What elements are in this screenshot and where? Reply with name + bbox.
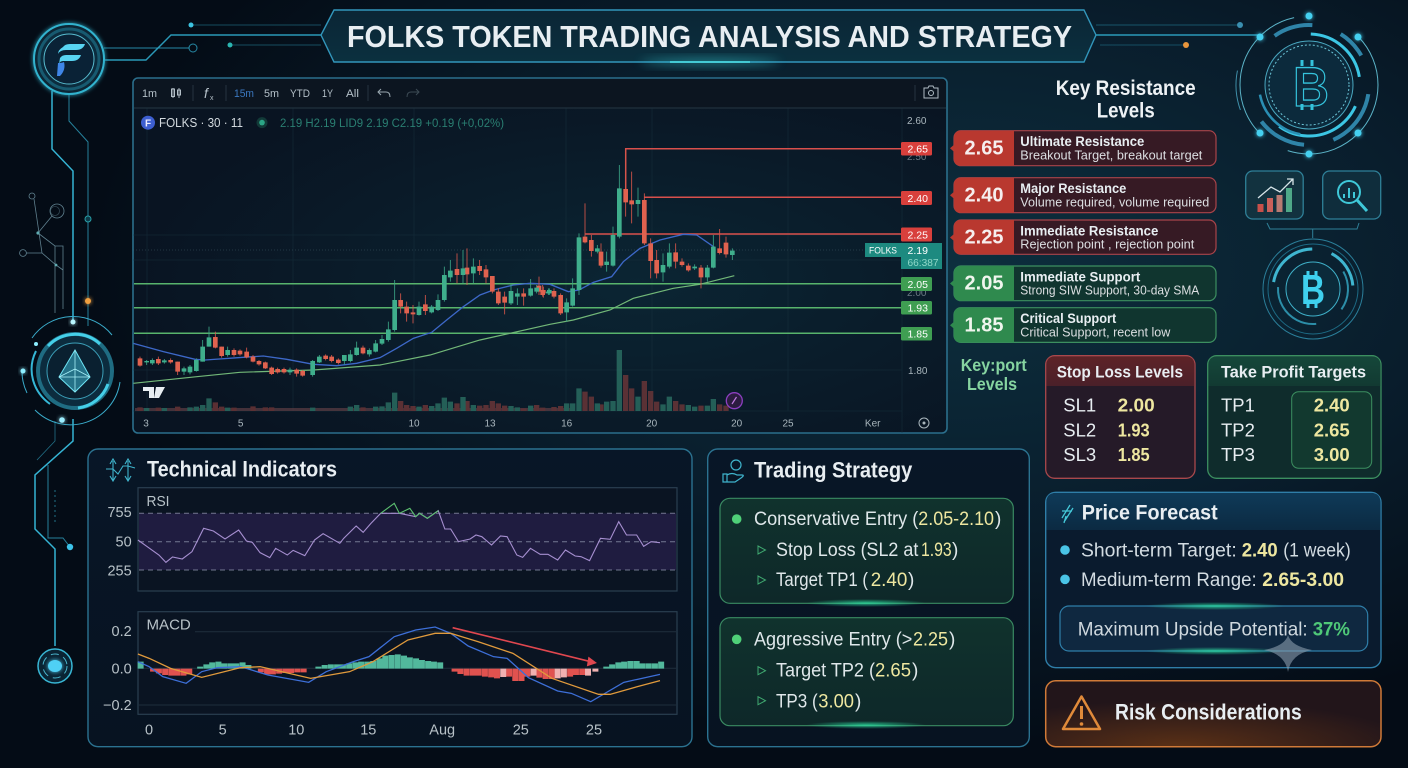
chart grid (133, 108, 902, 433)
take profit rows: TP3 (1221, 444, 1255, 465)
MACD chart (103, 612, 677, 714)
card: aggressive entry: Aggressive Entry (> (754, 630, 912, 651)
icon: bottom node (38, 649, 72, 683)
RSI chart: 50 (116, 535, 132, 551)
sparkle (1264, 635, 1312, 672)
stop loss rows: 2.00 (1118, 395, 1155, 416)
card: 2.40 major resistance: Major Resistance (1020, 181, 1127, 196)
card: 2.40 major resistance: 2.40 (965, 184, 1003, 206)
price axis (865, 116, 942, 377)
indicator x axis (145, 722, 602, 738)
time axis: 20 (646, 418, 658, 430)
time axis: 20 (731, 418, 743, 430)
panel: take profit targets: Take Profit Targets (1221, 362, 1366, 381)
time axis: 25 (782, 418, 794, 430)
card: 2.25 immediate resistance: Immediate Resistance (1020, 223, 1159, 238)
price axis: 2.65 (908, 144, 928, 156)
card: aggressive entry: ) (912, 661, 918, 682)
chart toolbar: 15m (234, 88, 254, 100)
forecast bullets: Medium-term Range: (1081, 570, 1257, 591)
MACD chart: 0.0 (112, 661, 132, 677)
panel: price forecast (1046, 492, 1381, 672)
MACD chart: MACD (146, 616, 191, 633)
RSI chart: 755 (107, 505, 132, 521)
MACD chart: −0.2 (103, 698, 132, 714)
card: 2.25 immediate resistance: 2.25 (965, 227, 1003, 249)
icon: magnifier tile (1323, 171, 1381, 219)
indicator x axis: 25 (513, 722, 529, 738)
icon: forecast bolt (1062, 505, 1073, 523)
card: conservative entry: Target TP1 ( (776, 570, 869, 591)
price axis: 2.05 (908, 279, 928, 291)
MACD chart: 0.2 (112, 624, 132, 640)
price axis: 1.93 (908, 303, 928, 315)
icon: bitcoin coin (1263, 239, 1363, 339)
card: 2.05 immediate support: Immediate Support (1020, 269, 1141, 284)
forecast bullets: Short-term Target: (1081, 541, 1237, 562)
price axis: 2.60 (907, 116, 927, 127)
chart toolbar: 1Y (322, 88, 334, 100)
card: 2.65 ultimate resistance: Ultimate Resistance (1020, 134, 1145, 149)
label: key support levels (961, 355, 1027, 394)
card: conservative entry: ) (995, 509, 1001, 530)
chart toolbar: YTD (290, 88, 310, 100)
time axis: Ker (865, 418, 881, 430)
stop loss rows (1063, 395, 1155, 465)
indicator x axis: 25 (586, 722, 602, 738)
panel: stop loss levels: Stop Loss Levels (1057, 362, 1183, 381)
chart legend: FOLKS · 30 · 11 (159, 115, 243, 130)
card: 2.65 ultimate resistance: Breakout Target, breakout target (1020, 148, 1203, 162)
card: conservative entry: 1.93 (921, 540, 952, 561)
card: 1.85 critical support: 1.85 (965, 314, 1003, 336)
indicator x axis: 15 (360, 722, 376, 738)
take profit rows: TP1 (1221, 395, 1255, 416)
moving averages (133, 234, 734, 383)
circuit decoration: left rail (20, 91, 91, 646)
time axis: 13 (484, 418, 496, 430)
take profit rows (1221, 395, 1350, 465)
card: 2.05 immediate support: Strong SIW Support, 30-day SMA (1020, 284, 1200, 298)
RSI chart: 255 (107, 564, 132, 580)
stop loss rows: 1.93 (1118, 420, 1150, 441)
panel: stop loss levels (1046, 356, 1195, 478)
stop loss rows: SL3 (1063, 444, 1096, 465)
label: key support levels: Levels (967, 374, 1017, 394)
card: conservative entry (720, 498, 1013, 607)
card: aggressive entry: 2.25 (913, 630, 948, 651)
chart toolbar: 1m (142, 88, 157, 100)
card: conservative entry: 2.40 (871, 570, 907, 591)
card: conservative entry: 2.05-2.10 (918, 509, 994, 530)
indicator x axis: Aug (429, 722, 455, 738)
icon: Ethereum node (20, 316, 120, 425)
card: 2.25 immediate resistance: Rejection point , rejection point (1020, 238, 1195, 252)
chart toolbar: f (204, 85, 210, 101)
circuit decoration: top lines (100, 22, 1260, 60)
card: 2.65 ultimate resistance: 2.65 (965, 137, 1003, 159)
card: aggressive entry (720, 618, 1013, 729)
candlesticks (140, 149, 732, 377)
indicator x axis: 0 (145, 722, 153, 738)
card: aggressive entry: ) (855, 691, 861, 712)
chart toolbar: 5m (264, 88, 279, 100)
card: 2.25 immediate resistance (950, 220, 1216, 254)
chart legend (141, 115, 504, 130)
card: conservative entry: ) (952, 540, 958, 561)
panel: technical indicators (88, 449, 692, 747)
icon: warning triangle (1063, 696, 1100, 729)
icon: hand with coin (723, 460, 743, 482)
panel: risk considerations: Risk Considerations (1115, 699, 1302, 724)
time axis (143, 418, 929, 430)
panel: candlestick chart (133, 78, 947, 433)
card: aggressive entry: 2.65 (875, 661, 911, 682)
volume bars (135, 350, 726, 411)
time axis: 16 (561, 418, 573, 430)
take profit rows: 2.65 (1314, 420, 1350, 441)
card: 2.40 major resistance: Volume required, volume required (1020, 195, 1209, 209)
icon: Folks logo (34, 24, 104, 94)
time axis: 5 (238, 418, 244, 430)
time axis: 10 (408, 418, 420, 430)
panel: take profit targets (1208, 356, 1381, 478)
card: aggressive entry: Target TP2 ( (776, 661, 876, 682)
MACD histogram (141, 654, 661, 681)
price axis: 1.85 (908, 329, 928, 341)
chart toolbar: All (346, 88, 359, 100)
resistance lines (585, 149, 902, 234)
price axis: 1.80 (908, 366, 928, 377)
card: conservative entry: ) (908, 570, 914, 591)
title banner (321, 10, 1096, 65)
chart legend: 2.19 H2.19 LID9 2.19 C2.19 +0.19 (+0,02%) (280, 118, 504, 130)
price axis: 2.40 (908, 193, 928, 205)
forecast bullets: 2.40 (1242, 541, 1278, 562)
indicator x axis: 5 (219, 722, 227, 738)
icon: bitcoin coin: B (1301, 266, 1325, 313)
event marker (726, 393, 742, 409)
TradingView mark (143, 387, 165, 398)
support lines (134, 284, 902, 333)
indicator x axis: 10 (288, 722, 304, 738)
price axis: 2.00 (907, 288, 927, 299)
RSI chart: RSI (146, 493, 170, 510)
heading: key resistance levels: Key Resistance (1056, 77, 1196, 100)
card: aggressive entry: TP3 ( (776, 691, 818, 712)
maximum upside callout: Maximum Upside Potential: (1078, 620, 1308, 641)
stop loss rows: 1.85 (1118, 444, 1150, 465)
card: 1.85 critical support: Critical Support (1020, 311, 1117, 326)
price axis: 2.25 (908, 230, 928, 242)
take profit rows: 3.00 (1314, 444, 1350, 465)
forecast bullets (1060, 541, 1351, 591)
panel: risk considerations (1046, 681, 1381, 747)
card: 2.05 immediate support (950, 266, 1216, 301)
card: 2.65 ultimate resistance (950, 131, 1216, 166)
panel: trading strategy (708, 449, 1029, 747)
heading: key resistance levels: Levels (1097, 100, 1155, 122)
maximum upside callout: 37% (1313, 620, 1350, 641)
icon: indicators (106, 459, 135, 481)
time axis: 3 (143, 418, 149, 430)
RSI chart (107, 488, 677, 591)
take profit rows: TP2 (1221, 420, 1255, 441)
price axis: FOLKS (869, 246, 897, 256)
panel: trading strategy: Trading Strategy (754, 458, 913, 483)
card: 2.05 immediate support: 2.05 (965, 273, 1003, 295)
label: key support levels: Key:port (961, 355, 1027, 375)
maximum upside callout (1060, 602, 1368, 655)
card: aggressive entry: ) (949, 630, 955, 651)
card: conservative entry: Conservative Entry ( (754, 509, 919, 530)
chart toolbar: x (210, 95, 214, 102)
icon: bitcoin dial large (1215, 0, 1403, 179)
card: conservative entry: Stop Loss (SL2 at (776, 540, 919, 561)
card: 1.85 critical support (950, 308, 1216, 342)
take profit rows: 2.40 (1314, 395, 1350, 416)
chart toolbar (134, 79, 946, 108)
title text: FOLKS TOKEN TRADING ANALYSIS AND STRATEGY (347, 20, 1072, 54)
icon: bitcoin dial large: B (1293, 55, 1329, 118)
card: 2.40 major resistance (950, 178, 1216, 213)
price axis: 2.19 (908, 245, 928, 257)
card: 1.85 critical support: Critical Support, recent low (1020, 325, 1171, 339)
stop loss rows: SL2 (1063, 420, 1096, 441)
stop loss rows: SL1 (1063, 395, 1096, 416)
bracket connector (1267, 223, 1359, 238)
chart legend: F (145, 118, 151, 130)
card: aggressive entry: 3.00 (818, 691, 854, 712)
divergence arrow (453, 628, 597, 666)
price axis: 2.50 (907, 152, 927, 163)
heading: key resistance levels (1056, 77, 1196, 122)
forecast bullets: (1 week) (1283, 541, 1351, 562)
forecast bullets: 2.65-3.00 (1262, 570, 1344, 591)
price axis: 66:387 (908, 257, 939, 269)
panel: price forecast: Price Forecast (1082, 501, 1218, 524)
icon: growth chart tile (1246, 171, 1303, 219)
panel: technical indicators: Technical Indicators (147, 457, 337, 482)
